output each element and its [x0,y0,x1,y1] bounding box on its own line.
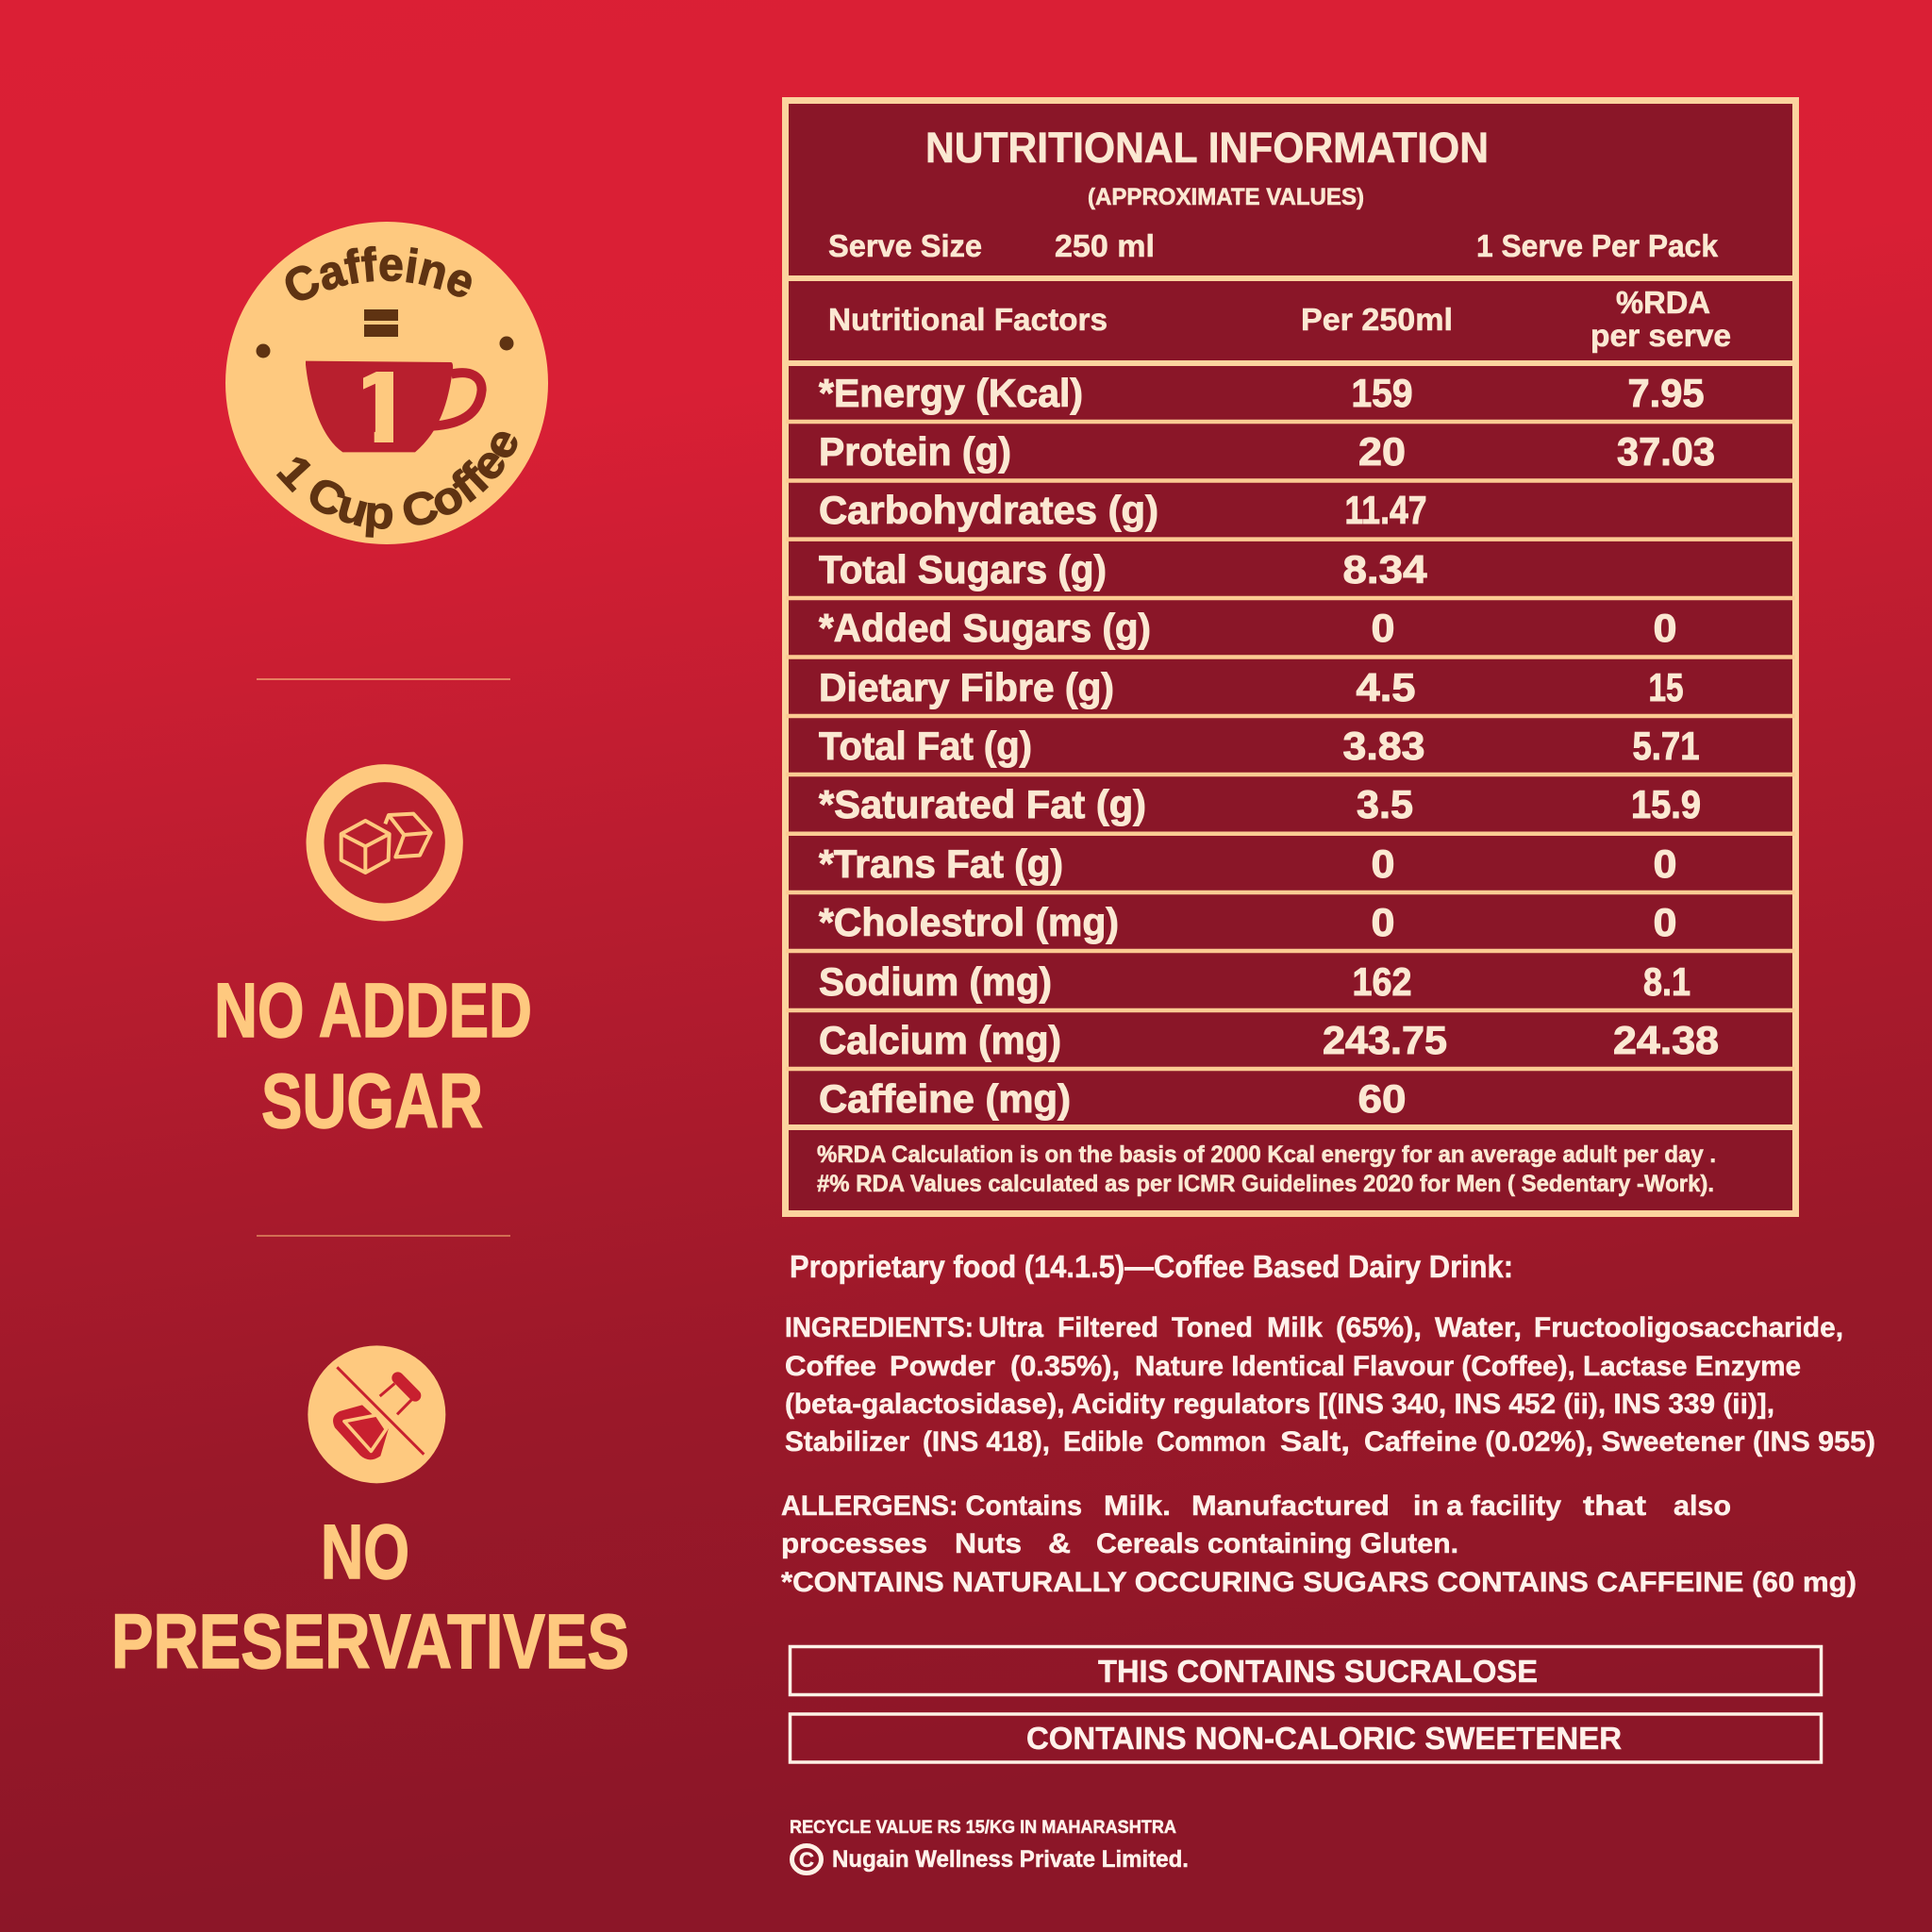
callout: contains non-caloric sweetener [791,1714,1821,1762]
row labels: Dietary Fibre (g) [819,665,1114,709]
row labels: *Trans Fat (g) [819,841,1063,886]
text: ingredients: Stabilizer [785,1426,910,1457]
column headers: Nutritional Factors [828,302,1108,337]
table footnotes: %RDA Calculation is on the basis of 2000 Kcal energy for an average adult per day . [817,1141,1716,1168]
rda values: 0 [1653,900,1677,944]
text: recycle value: RECYCLE VALUE RS 15/KG IN MAHARASHTRA [790,1818,1176,1838]
text: ingredients [785,1312,1875,1457]
column headers: Per 250ml [1301,302,1453,337]
rda values: 24.38 [1613,1018,1719,1062]
text: ingredients: Powder [890,1351,996,1382]
text: allergens: *CONTAINS NATURALLY OCCURING SUGARS CONTAINS CAFFEINE (60 mg) [781,1567,1857,1598]
rda values [1613,371,1719,1062]
cup number: 1 [342,349,421,464]
text: allergens: in a facility [1413,1491,1562,1522]
text: ingredients: Caffeine (0.02%), Sweetener (INS 955) [1364,1426,1875,1457]
text: ingredients: Ultra [978,1312,1044,1343]
column headers: %RDA [1616,285,1710,320]
text: ingredients: (beta-galactosidase), Acidity regulators [(INS 340, INS 452 (ii), INS 339 (ii)], [785,1389,1774,1420]
row labels: *Energy (Kcal) [819,371,1083,415]
icon: no preservatives flask [308,1345,445,1483]
text: ingredients: Water, [1435,1312,1522,1343]
icon: copyright [792,1845,821,1874]
table footnotes [817,1141,1716,1197]
per 250ml values: 4.5 [1357,665,1415,709]
text: allergens: Nuts [955,1528,1022,1559]
badge: caffeine equals 1 cup coffee [225,222,548,544]
rda values: 0 [1653,841,1677,886]
heading: no added sugar [214,968,532,1144]
heading: no preservatives: PRESERVATIVES [111,1599,629,1685]
per 250ml values: 3.83 [1343,724,1424,768]
per 250ml values: 20 [1358,429,1406,474]
row labels: *Saturated Fat (g) [819,782,1146,826]
text: allergens: that [1583,1491,1646,1522]
text: ingredients: Toned [1172,1312,1253,1343]
text: ingredients: Coffee [785,1351,876,1382]
rda values: 0 [1653,606,1677,650]
text: allergens: & [1048,1528,1071,1559]
rda values: 8.1 [1643,959,1690,1004]
text: ingredients: Nature Identical Flavour (Coffee), Lactase Enzyme [1135,1351,1801,1382]
rda values: 15.9 [1631,782,1701,826]
per 250ml values: 0 [1372,900,1394,944]
text: ingredients: INGREDIENTS: [785,1312,974,1343]
badge text: 1 Cup Coffee: 1 Cup Coffee [275,432,517,538]
text: ingredients: Edible [1063,1426,1143,1457]
icon: coffee cup [306,361,482,452]
serve size row: 250 ml [1055,228,1155,263]
rda values: 37.03 [1617,429,1715,474]
row labels: Total Fat (g) [819,724,1032,768]
text: allergens: Milk. [1104,1491,1171,1522]
per 250ml values: 8.34 [1343,547,1427,591]
row labels: Carbohydrates (g) [819,488,1158,532]
per 250ml values: 0 [1372,841,1394,886]
row labels [819,371,1158,1121]
row labels: Protein (g) [819,429,1011,474]
per 250ml values: 162 [1353,959,1411,1004]
text: allergens: also [1674,1491,1731,1522]
text: ingredients: (0.35%), [1010,1351,1120,1382]
rda values: 7.95 [1628,371,1704,415]
icon: sugar cubes [315,774,454,912]
text: allergens: Manufactured [1191,1491,1390,1522]
text: allergens: processes [781,1528,927,1559]
row labels: *Added Sugars (g) [819,606,1151,650]
per 250ml values: 11.47 [1345,488,1426,532]
per 250ml values: 0 [1372,606,1394,650]
text: ingredients: Filtered [1058,1312,1158,1343]
callout: contains non-caloric sweetener: CONTAINS NON-CALORIC SWEETENER [1026,1721,1622,1756]
equals sign [364,309,398,337]
text: allergens [781,1491,1857,1598]
row labels: *Cholestrol (mg) [819,900,1119,944]
heading: no added sugar: NO ADDED [214,968,532,1054]
text: ingredients: Salt, [1280,1426,1350,1457]
text: allergens: Cereals containing Gluten. [1096,1528,1458,1559]
heading: no preservatives: NO [321,1509,409,1595]
callout: this contains sucralose: THIS CONTAINS SUCRALOSE [1098,1654,1538,1689]
callout: this contains sucralose [791,1647,1821,1694]
text: ingredients: Common [1157,1426,1266,1457]
text: ingredients: (65%), [1336,1312,1422,1343]
text: ingredients: Fructooligosaccharide, [1534,1312,1843,1343]
rda values: 15 [1649,665,1683,709]
per 250ml values: 159 [1351,371,1413,415]
icon: copyright: C [799,1848,814,1872]
row labels: Calcium (mg) [819,1018,1061,1062]
heading: no preservatives [111,1509,629,1685]
column headers [828,285,1731,353]
serve size row [828,228,1719,263]
rda values: 5.71 [1632,724,1700,768]
row labels: Caffeine (mg) [819,1076,1071,1121]
serve size row: Serve Size [828,228,982,263]
table subtitle: (APPROXIMATE VALUES) [1088,184,1364,210]
table title: NUTRITIONAL INFORMATION [925,124,1489,172]
table footnotes: #% RDA Values calculated as per ICMR Guidelines 2020 for Men ( Sedentary -Work). [817,1171,1714,1197]
row labels: Sodium (mg) [819,959,1052,1004]
text: company name: Nugain Wellness Private Limited. [832,1846,1189,1873]
heading: no added sugar: SUGAR [261,1058,483,1144]
copyright line [792,1845,1189,1874]
panel: nutritional information table [785,100,1796,1213]
serve size row: 1 Serve Per Pack [1476,228,1719,263]
per 250ml values: 243.75 [1323,1018,1447,1062]
per 250ml values: 3.5 [1357,782,1413,826]
badge text: Caffeine: Caffeine [285,245,472,300]
per 250ml values: 60 [1358,1076,1406,1121]
text: allergens: ALLERGENS: Contains [781,1491,1082,1522]
column headers: per serve [1591,318,1731,353]
text: product category: Proprietary food (14.1.5)—Coffee Based Dairy Drink: [790,1249,1513,1284]
text: ingredients: (INS 418), [923,1426,1050,1457]
text: ingredients: Milk [1267,1312,1324,1343]
row labels: Total Sugars (g) [819,547,1107,591]
per 250ml values [1323,371,1447,1121]
badge dots [257,336,513,358]
